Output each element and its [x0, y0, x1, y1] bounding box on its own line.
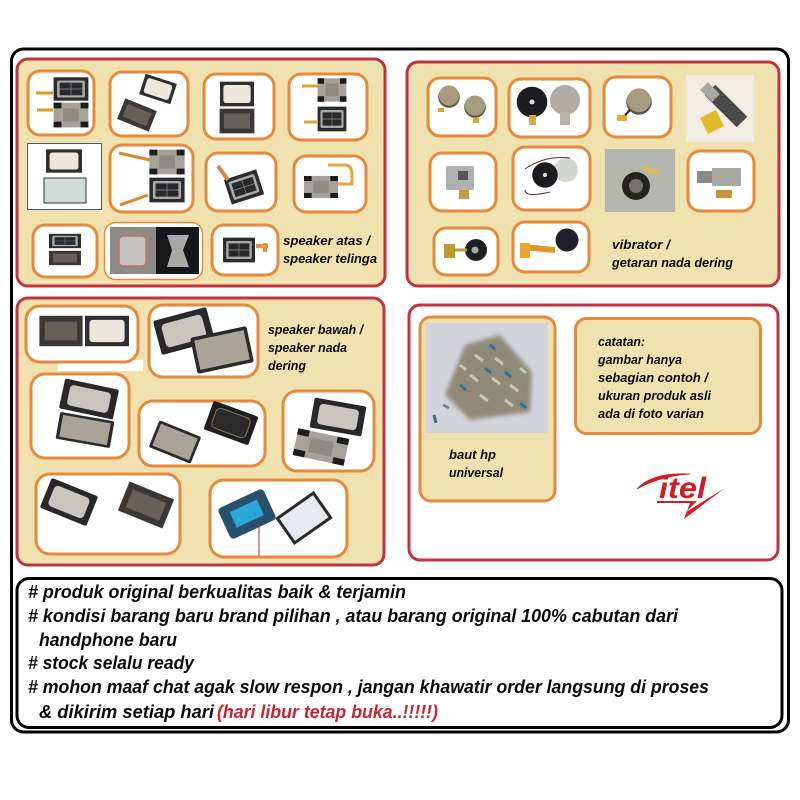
label: vibrator: getaran nada dering	[611, 255, 733, 270]
item: vibrator 4 photo	[686, 75, 754, 142]
label: baut hp: baut hp	[449, 447, 496, 462]
item: loud speaker 5	[283, 391, 374, 471]
item: vibrator 8	[688, 151, 754, 211]
item: speaker 10	[104, 222, 202, 280]
item: vibrator 10	[513, 222, 589, 272]
card: catatan	[576, 318, 760, 434]
item: speaker 1	[28, 71, 94, 135]
note lines: # stock selalu ready	[28, 653, 195, 673]
panel: vibrator	[407, 62, 779, 286]
panel: baut dan catatan	[409, 305, 778, 560]
item: loud speaker 3	[31, 374, 129, 458]
item: vibrator 5	[430, 153, 496, 211]
item: speaker 2	[110, 72, 188, 136]
item: speaker 3	[204, 74, 274, 139]
note lines	[28, 582, 709, 722]
label: speaker bawah: speaker nada	[268, 340, 347, 355]
label: speaker bawah	[268, 322, 364, 373]
note lines: # mohon maaf chat agak slow respon , jangan khawatir order langsung di proses	[28, 677, 709, 697]
item: loud speaker 1	[26, 306, 143, 371]
item: loud speaker 4	[139, 401, 265, 466]
note text: ada di foto varian	[598, 406, 704, 421]
label: vibrator	[611, 237, 733, 270]
red note: (hari libur tetap buka..!!!!!)	[217, 702, 438, 722]
note text: sebagian contoh /	[598, 370, 709, 385]
item: vibrator 6	[513, 147, 590, 210]
note lines: # kondisi barang baru brand pilihan , atau barang original 100% cabutan dari	[28, 606, 679, 626]
item: vibrator 2	[509, 79, 590, 137]
note lines: # produk original berkualitas baik & terjamin	[28, 582, 406, 602]
logo: itel	[637, 472, 725, 519]
item: speaker 9	[33, 225, 97, 277]
item: vibrator 7 photo	[605, 149, 675, 212]
note text	[597, 334, 711, 421]
item: loud speaker 7	[210, 480, 347, 557]
item: speaker 5	[28, 144, 102, 210]
item: speaker 4	[289, 74, 367, 140]
label: speaker atas	[283, 233, 377, 266]
item: vibrator 1	[428, 78, 496, 136]
card: baut hp	[420, 317, 555, 501]
label: speaker atas: speaker atas /	[283, 233, 371, 248]
label: speaker atas: speaker telinga	[283, 251, 377, 266]
note text: gambar hanya	[597, 352, 682, 367]
note text: catatan:	[598, 334, 645, 349]
item: speaker 8	[294, 156, 366, 212]
label: speaker bawah: speaker bawah /	[268, 322, 364, 337]
photo: screws	[426, 323, 548, 433]
item: speaker 11	[212, 225, 278, 275]
item: loud speaker 6	[36, 474, 180, 554]
note lines: handphone baru	[39, 630, 177, 650]
notes box	[17, 578, 782, 728]
panel: speaker atas	[17, 59, 385, 286]
label: baut hp: universal	[449, 465, 503, 480]
item: vibrator 9	[434, 228, 498, 275]
label: speaker bawah: dering	[268, 358, 306, 373]
item: speaker 6	[110, 145, 193, 212]
logo: itel: itel	[659, 472, 707, 505]
label: baut hp	[449, 447, 503, 480]
item: loud speaker 2	[149, 305, 258, 377]
label: vibrator: vibrator /	[612, 237, 671, 252]
item: speaker 7	[206, 153, 276, 211]
note lines: & dikirim setiap hari	[39, 702, 215, 722]
item: vibrator 3	[604, 77, 671, 137]
panel: speaker bawah	[17, 298, 384, 565]
note text: ukuran produk asli	[598, 388, 711, 403]
